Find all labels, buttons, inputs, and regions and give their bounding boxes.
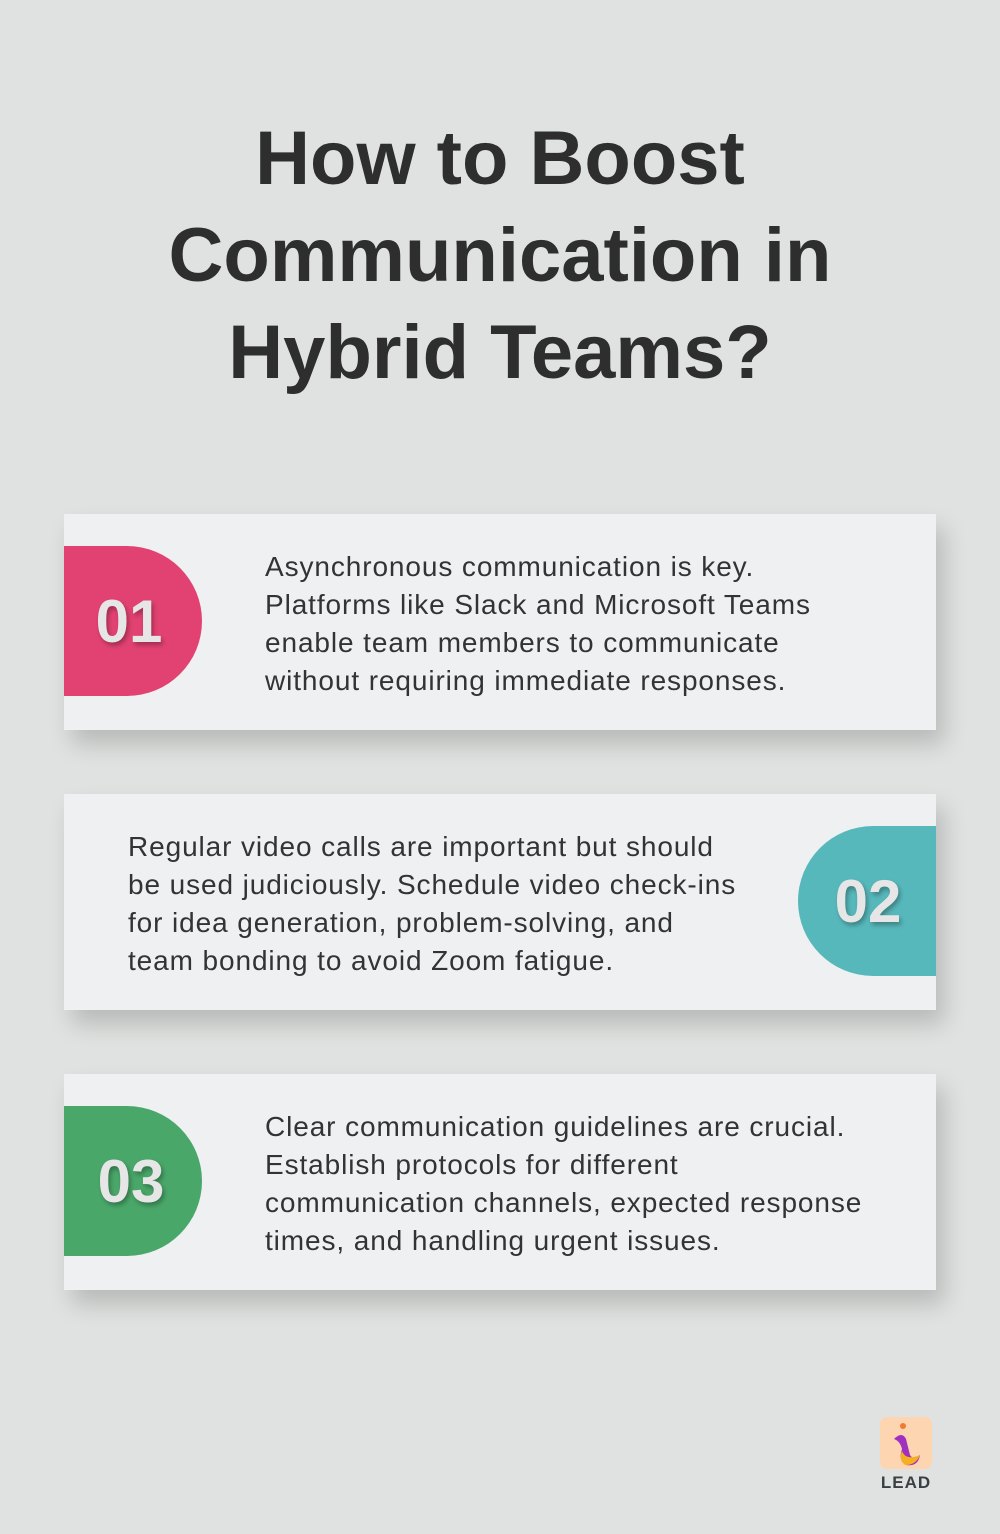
- badge 01: 01: [96, 588, 162, 654]
- title: [169, 116, 831, 395]
- text 02: Regular video calls are important but should: [128, 831, 714, 862]
- text 02: [128, 831, 736, 976]
- panel: step 01: [64, 514, 936, 730]
- badge 03: [64, 1106, 202, 1256]
- badge 02: 02: [835, 868, 901, 934]
- badge 01: [64, 546, 202, 696]
- title: How to Boost: [255, 116, 745, 201]
- badge 02: [798, 826, 936, 976]
- text 01: without requiring immediate responses.: [265, 665, 786, 696]
- text 02: for idea generation, problem-solving, and: [128, 907, 674, 938]
- logo text: LEAD: [881, 1473, 931, 1492]
- text 01: [265, 551, 811, 696]
- logo: [880, 1417, 932, 1492]
- text 02: be used judiciously. Schedule video check-ins: [128, 869, 736, 900]
- icon: logo mark: [880, 1417, 932, 1469]
- text 03: communication channels, expected response: [265, 1187, 862, 1218]
- text 03: times, and handling urgent issues.: [265, 1225, 721, 1256]
- text 03: Clear communication guidelines are crucial.: [265, 1111, 845, 1142]
- badge 03: 03: [98, 1148, 164, 1214]
- text 02: team bonding to avoid Zoom fatigue.: [128, 945, 614, 976]
- title: Hybrid Teams?: [228, 310, 772, 395]
- panel: step 02: [64, 794, 936, 1010]
- panel: step 03: [64, 1074, 936, 1290]
- text 03: [265, 1111, 862, 1256]
- title: Communication in: [169, 213, 831, 298]
- text 03: Establish protocols for different: [265, 1149, 679, 1180]
- text 01: enable team members to communicate: [265, 627, 780, 658]
- text 01: Platforms like Slack and Microsoft Teams: [265, 589, 811, 620]
- text 01: Asynchronous communication is key.: [265, 551, 754, 582]
